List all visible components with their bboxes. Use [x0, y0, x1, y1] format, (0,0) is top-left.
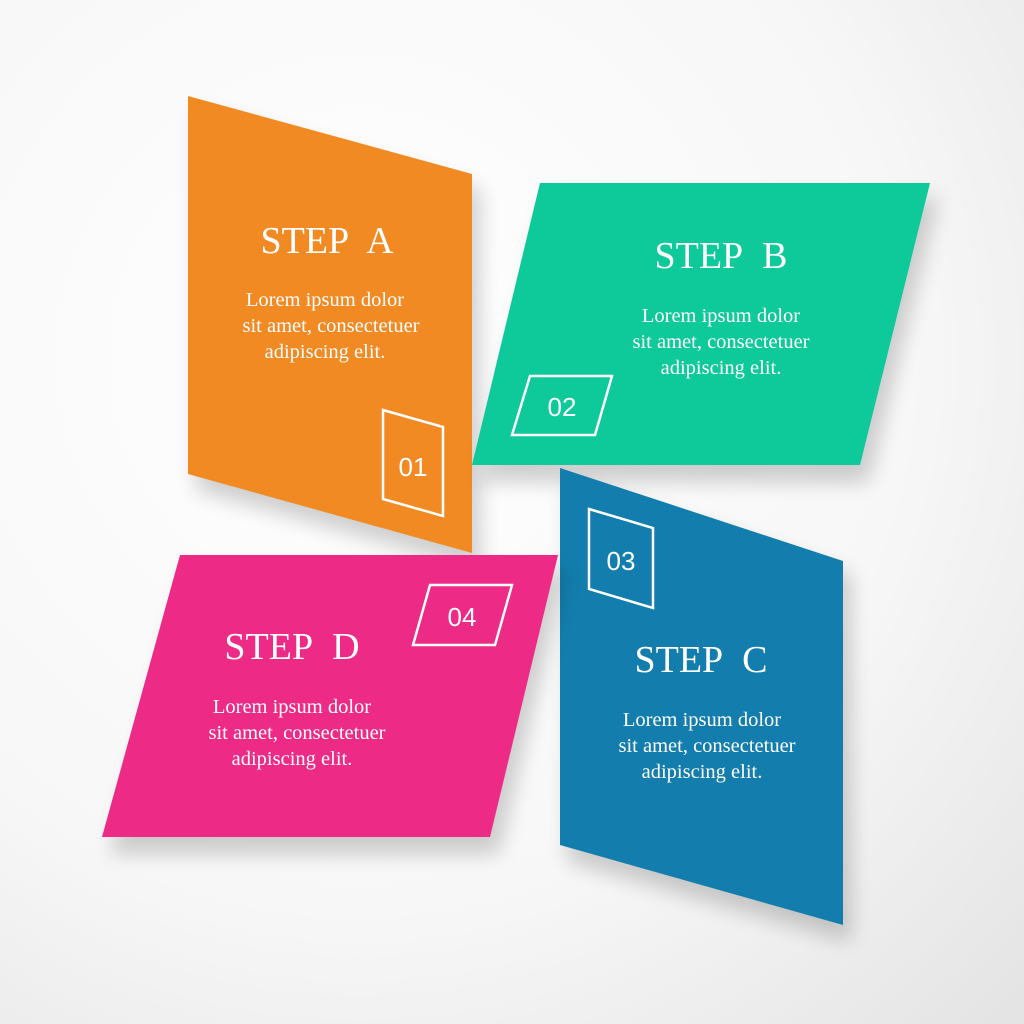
- panel: step D: [102, 555, 566, 854]
- panel: step B: [472, 183, 938, 482]
- number box 04: 04: [448, 602, 476, 632]
- text: step B: adipiscing elit.: [661, 357, 781, 379]
- heading: step A: STEP A: [260, 220, 394, 262]
- number box 01: 01: [399, 452, 427, 482]
- heading: step D: STEP D: [224, 626, 360, 668]
- number box 03: [589, 509, 653, 608]
- text: step D: sit amet, consectetuer: [208, 722, 386, 744]
- panel: step C: [560, 468, 851, 942]
- panel: step A: [188, 96, 480, 570]
- text: step A: Lorem ipsum dolor: [246, 289, 404, 311]
- text: step D: Lorem ipsum dolor: [213, 696, 371, 718]
- text: step C: sit amet, consectetuer: [618, 735, 796, 757]
- text: step B: Lorem ipsum dolor: [642, 305, 800, 327]
- text: step D: adipiscing elit.: [232, 748, 352, 770]
- text: step A: sit amet, consectetuer: [242, 315, 420, 337]
- text: step C: adipiscing elit.: [642, 761, 762, 783]
- number box 02: [512, 376, 612, 435]
- text: step A: adipiscing elit.: [265, 341, 385, 363]
- text: step C: Lorem ipsum dolor: [623, 709, 781, 731]
- text: step B: sit amet, consectetuer: [632, 331, 810, 353]
- heading: step B: STEP B: [654, 235, 788, 277]
- number box 02: 02: [548, 392, 576, 422]
- number box 01: [383, 410, 443, 516]
- number box 04: [413, 585, 512, 645]
- heading: step C: STEP C: [634, 639, 768, 681]
- number box 03: 03: [607, 546, 635, 576]
